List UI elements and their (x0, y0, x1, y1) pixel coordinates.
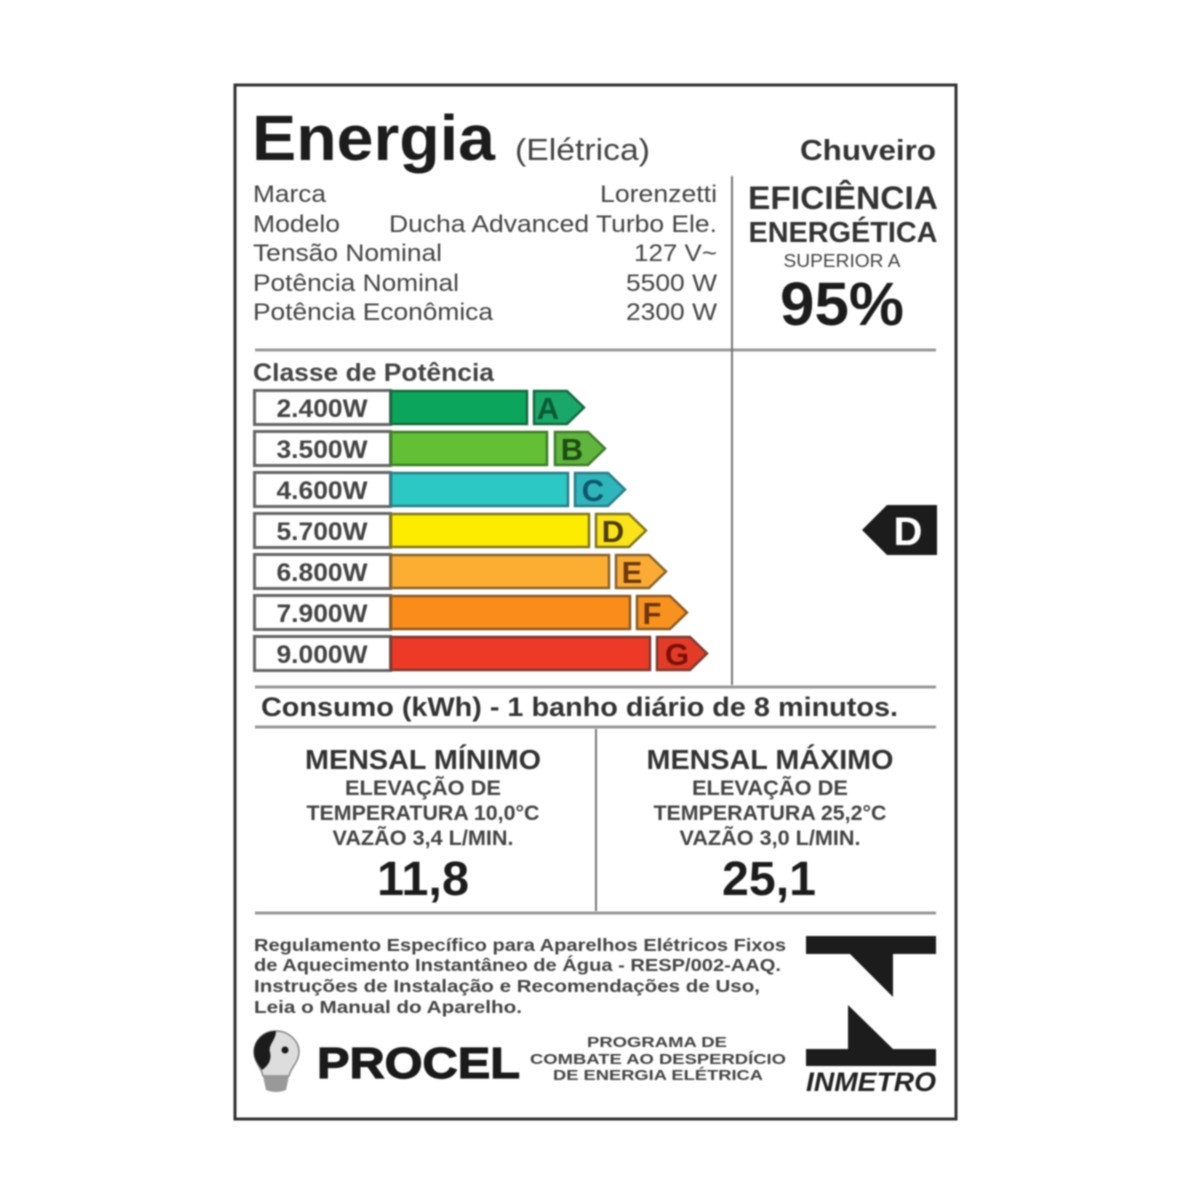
product specifications (253, 181, 717, 326)
icon: Procel light bulb (254, 1031, 299, 1092)
class G row: 9.000W (276, 641, 368, 669)
Procel programme text (530, 1034, 786, 1084)
Procel programme text: PROGRAMA DE (587, 1034, 727, 1051)
product specifications: 2300 W (626, 299, 717, 326)
title: Energia: Energia (252, 102, 495, 174)
panel: monthly maximum: ELEVAÇÃO DE (692, 777, 848, 800)
class F row: 7.900W (276, 600, 368, 628)
panel: monthly maximum (646, 744, 894, 906)
product specifications: Lorenzetti (600, 181, 717, 208)
icon: Inmetro logo (806, 936, 936, 1097)
class D row: D (602, 514, 624, 549)
product specifications: 127 V~ (634, 240, 717, 267)
panel: monthly minimum: MENSAL MÍNIMO (305, 744, 541, 775)
energy efficiency block: EFICIÊNCIA (748, 180, 938, 216)
regulation text: Leia o Manual do Aparelho. (254, 997, 522, 1017)
panel: monthly maximum: MENSAL MÁXIMO (646, 744, 894, 775)
panel: monthly maximum: TEMPERATURA 25,2°C (654, 802, 886, 825)
class E row (254, 554, 666, 590)
class E row: 6.800W (276, 559, 368, 587)
class C row (254, 472, 625, 508)
regulation text: Regulamento Específico para Aparelhos Elétricos Fixos (254, 935, 786, 955)
product specifications: 5500 W (626, 270, 717, 297)
energy efficiency block (748, 180, 938, 338)
product specifications: Ducha Advanced Turbo Ele. (389, 211, 717, 238)
product specifications: Tensão Nominal (253, 240, 442, 267)
Procel logotype: PROCEL (317, 1039, 520, 1088)
class A row (254, 390, 584, 426)
product specifications: Potência Nominal (253, 270, 459, 297)
class G row: G (665, 637, 689, 672)
regulation text: de Aquecimento Instantâneo de Água - RESP/002-AAQ. (254, 954, 781, 975)
class E row: E (622, 555, 642, 590)
Procel programme text: COMBATE AO DESPERDÍCIO (530, 1051, 786, 1068)
class A row: A (537, 391, 559, 426)
energy efficiency block: SUPERIOR A (784, 251, 900, 271)
product type: Chuveiro (800, 135, 936, 167)
class B row (254, 432, 605, 467)
product specifications: Marca (253, 181, 327, 208)
regulation text (254, 935, 786, 1017)
class F row (254, 596, 687, 631)
panel: monthly minimum: TEMPERATURA 10,0°C (306, 802, 540, 825)
class C row: C (582, 473, 604, 508)
panel: monthly minimum: 11,8 (377, 853, 469, 906)
product specifications: Potência Econômica (253, 299, 494, 326)
class G row (254, 636, 707, 672)
rating arrow: D: D (894, 510, 922, 554)
class A row: 2.400W (276, 395, 368, 423)
heading: power classes: Classe de Potência (253, 359, 495, 387)
class D row (254, 514, 646, 549)
panel: monthly minimum: VAZÃO 3,4 L/MIN. (332, 827, 514, 850)
panel: monthly maximum: VAZÃO 3,0 L/MIN. (680, 827, 860, 850)
energy efficiency block: ENERGÉTICA (748, 215, 938, 249)
energy efficiency block: 95% (780, 270, 904, 338)
class F row: F (643, 596, 661, 631)
product specifications: Modelo (253, 211, 340, 238)
subtitle: Elétrica: (Elétrica) (515, 132, 650, 167)
regulation text: Instruções de Instalação e Recomendações de Uso, (254, 976, 760, 996)
panel: monthly minimum (305, 744, 541, 906)
class B row: 3.500W (276, 436, 368, 464)
icon: Inmetro logo: INMETRO (806, 1067, 936, 1097)
panel: monthly minimum: ELEVAÇÃO DE (345, 777, 501, 800)
panel: monthly maximum: 25,1 (722, 853, 816, 906)
chart: power classes (254, 390, 707, 672)
rating arrow: D (862, 505, 937, 555)
consumption heading: Consumo (kWh) - 1 banho diário de 8 minutos. (261, 692, 898, 722)
class D row: 5.700W (276, 518, 368, 546)
label frame (235, 85, 956, 1119)
Procel programme text: DE ENERGIA ELÉTRICA (553, 1067, 763, 1084)
class B row: B (561, 432, 583, 467)
class C row: 4.600W (276, 477, 368, 505)
